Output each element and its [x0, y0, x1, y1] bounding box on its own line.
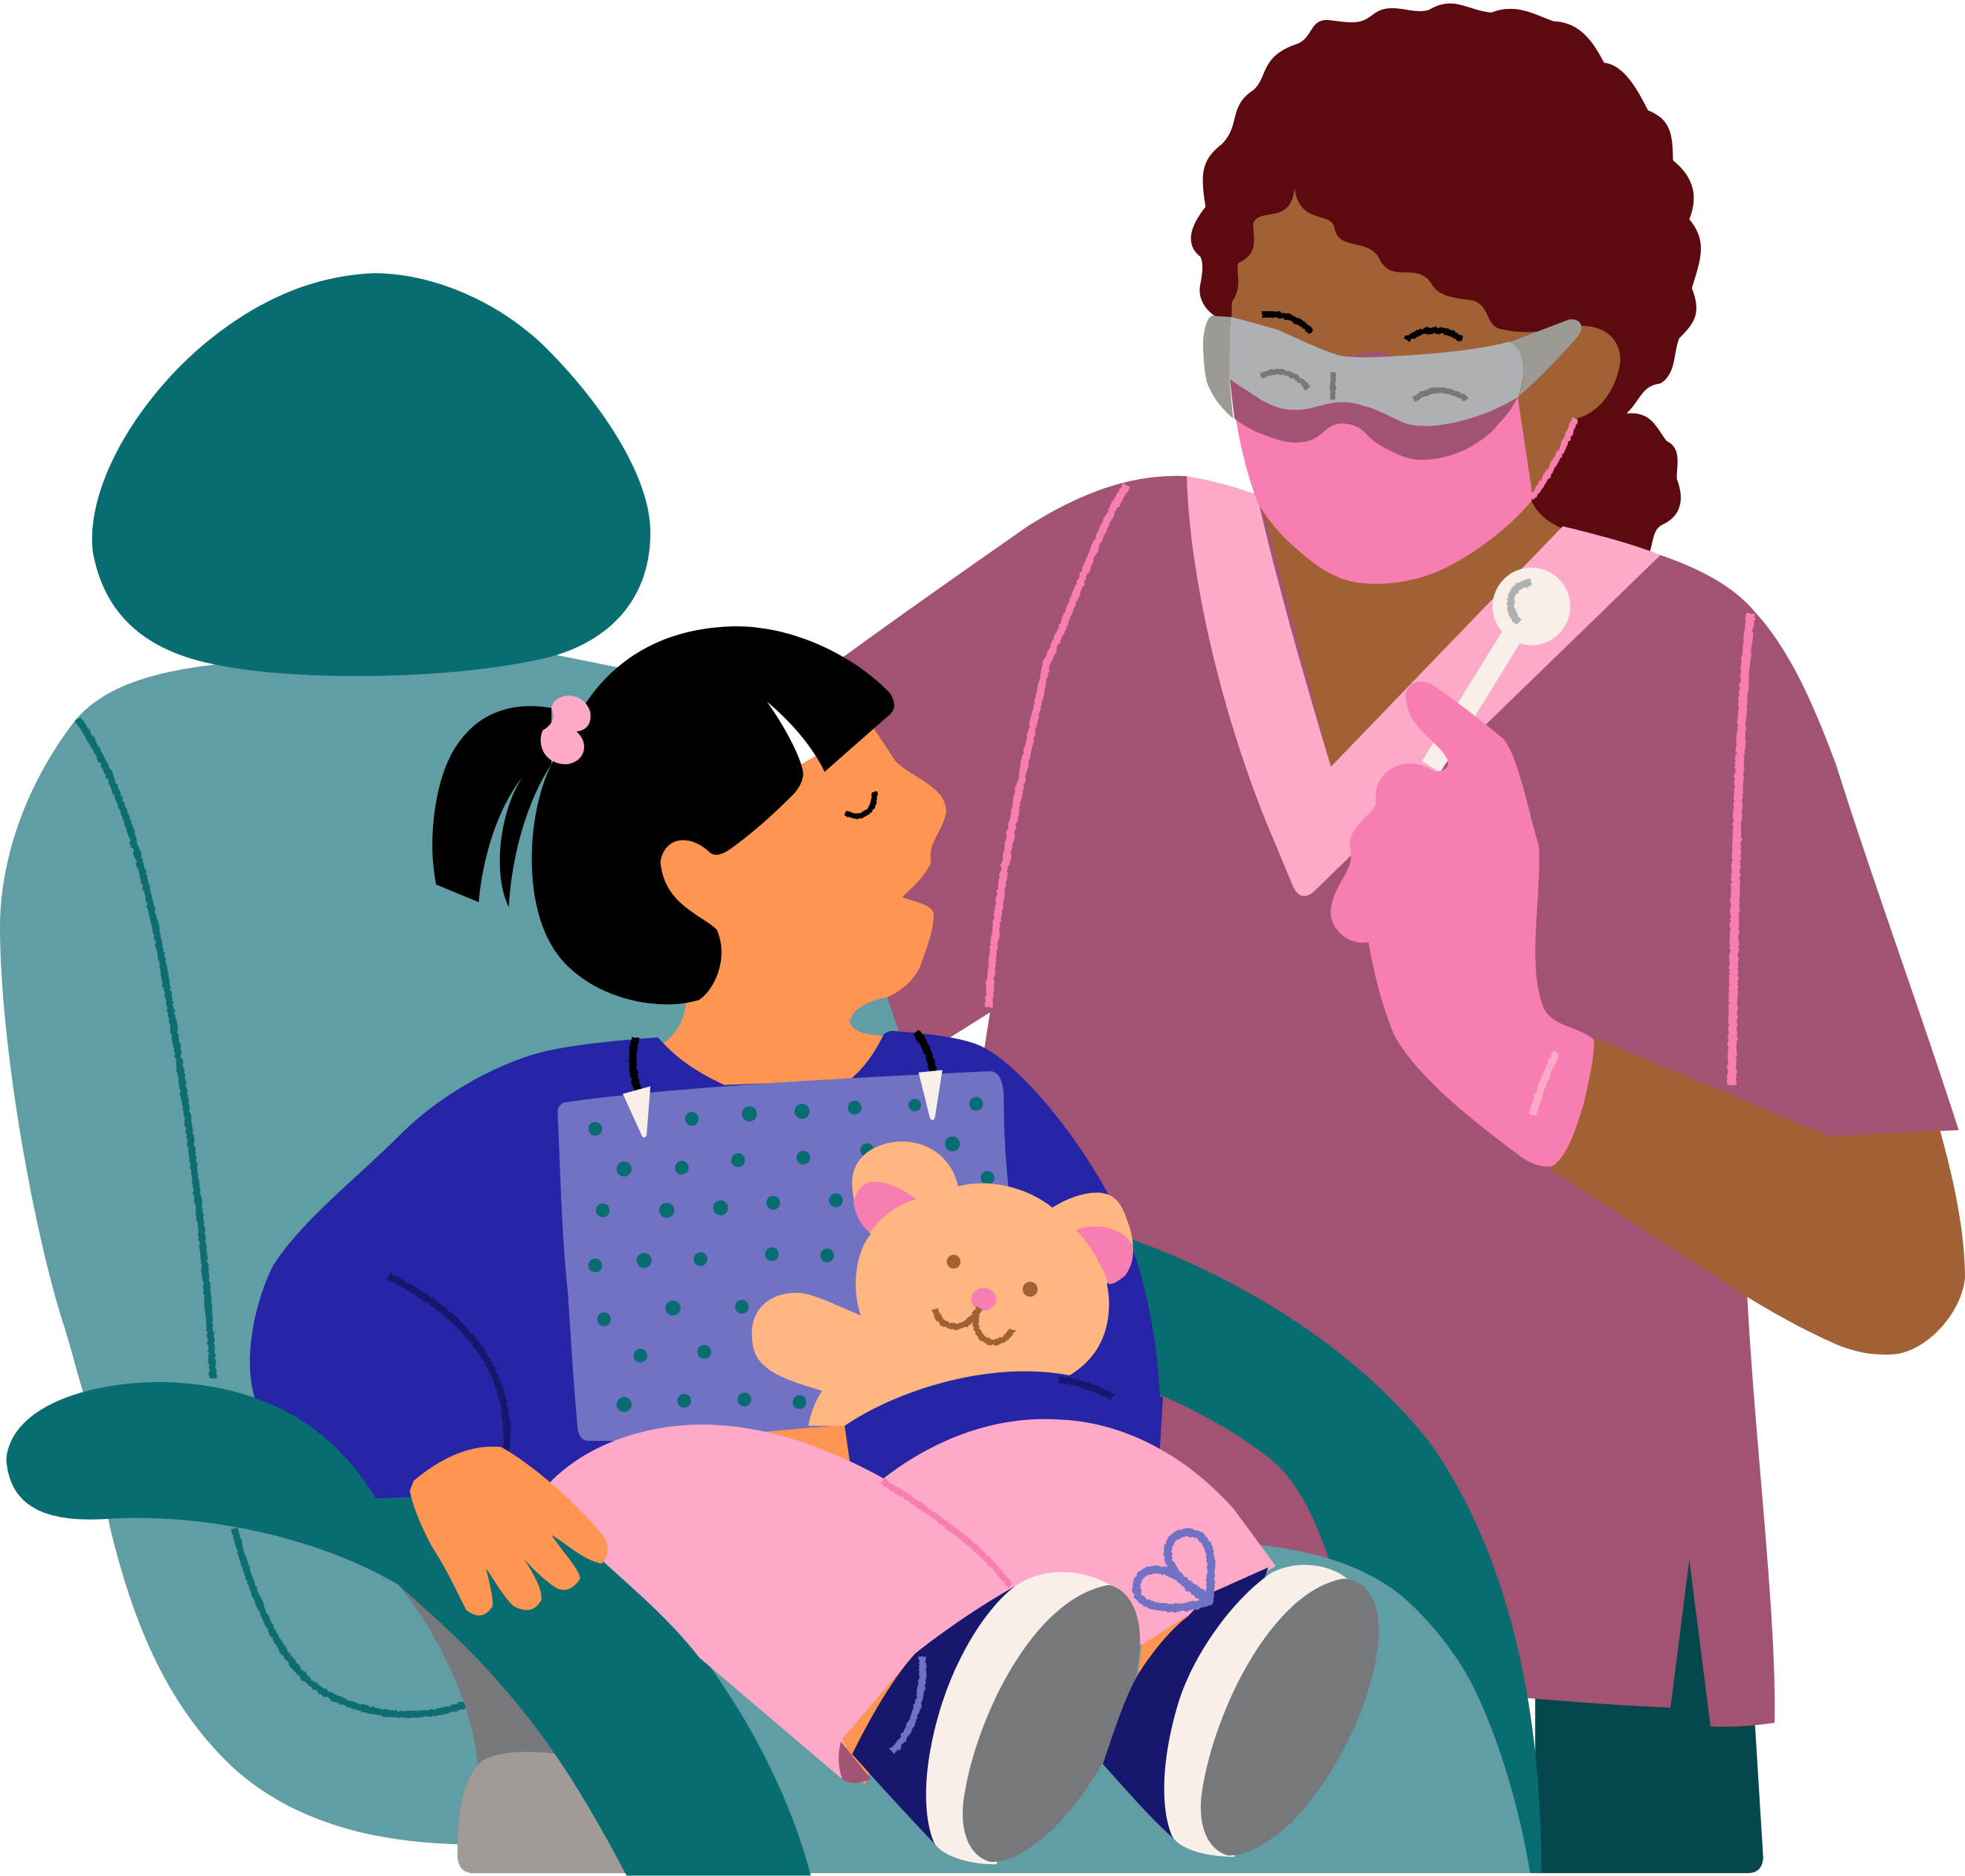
child figure — [6, 626, 1379, 1875]
child hand — [410, 1447, 608, 1616]
chair back — [0, 654, 899, 1873]
sweater arm over teddy — [844, 1371, 1163, 1497]
child legs — [548, 1419, 1276, 1779]
teddy eyes — [946, 1255, 1038, 1297]
goggles — [1203, 315, 1582, 426]
shoelace bow — [1136, 1532, 1211, 1607]
dentist trousers — [1535, 1554, 1763, 1873]
chair back stitching — [77, 719, 213, 1378]
child eye — [846, 792, 875, 816]
chair headrest — [92, 273, 650, 676]
child face and neck — [626, 725, 946, 1109]
teddy bear — [751, 1141, 1133, 1426]
teddy right ear — [1050, 1192, 1133, 1291]
bib dots — [589, 1097, 995, 1412]
chair base grey — [399, 1585, 558, 1773]
dentist eyebrows — [1262, 315, 1461, 339]
child ankle — [842, 1615, 1188, 1785]
dental mirror — [1431, 568, 1570, 767]
chair seat — [696, 1545, 1530, 1873]
bib clip left — [623, 1038, 650, 1137]
child sweater — [250, 1031, 1161, 1501]
dentist hair — [1191, 4, 1701, 558]
chair right arm — [1128, 1238, 1542, 1873]
chair lower stitching — [234, 1529, 467, 1715]
white gap beside scrubs — [946, 1012, 990, 1053]
scrubs chalk line left — [989, 485, 1126, 1007]
dentist eyes behind goggles — [1260, 372, 1466, 399]
dentist mask — [1231, 363, 1531, 584]
child shoe left — [852, 1572, 1140, 1864]
scrubs collar — [1187, 476, 1661, 896]
dentist neck and face — [1231, 188, 1621, 767]
scrubs seen through chair — [1128, 1395, 1330, 1561]
hair bow — [541, 696, 591, 764]
goggles shadow on mask — [1229, 351, 1518, 460]
mask ear loop — [1531, 419, 1575, 498]
child shoe right — [1103, 1565, 1379, 1857]
dentist scrubs — [842, 476, 1959, 1726]
chair left arm — [6, 1382, 811, 1875]
teddy mouth — [935, 1308, 1013, 1343]
scrubs chalk line right — [1732, 614, 1751, 1085]
dentist glove — [1330, 681, 1594, 1166]
dental chair — [0, 273, 1542, 1873]
child hand behind teddy — [762, 1424, 852, 1479]
child hair — [432, 626, 894, 1004]
bib clip right — [916, 1032, 943, 1120]
chair pedestal — [458, 1752, 626, 1873]
teddy nose — [971, 1288, 996, 1311]
dentist forearm — [1548, 1038, 1965, 1355]
sweater chalk lines — [388, 1276, 1113, 1451]
chair sliver under chin — [850, 998, 899, 1036]
child bib — [558, 1071, 1040, 1441]
dentist figure — [842, 4, 1965, 1873]
teddy left ear — [852, 1141, 958, 1241]
teddy body and head — [751, 1183, 1109, 1426]
